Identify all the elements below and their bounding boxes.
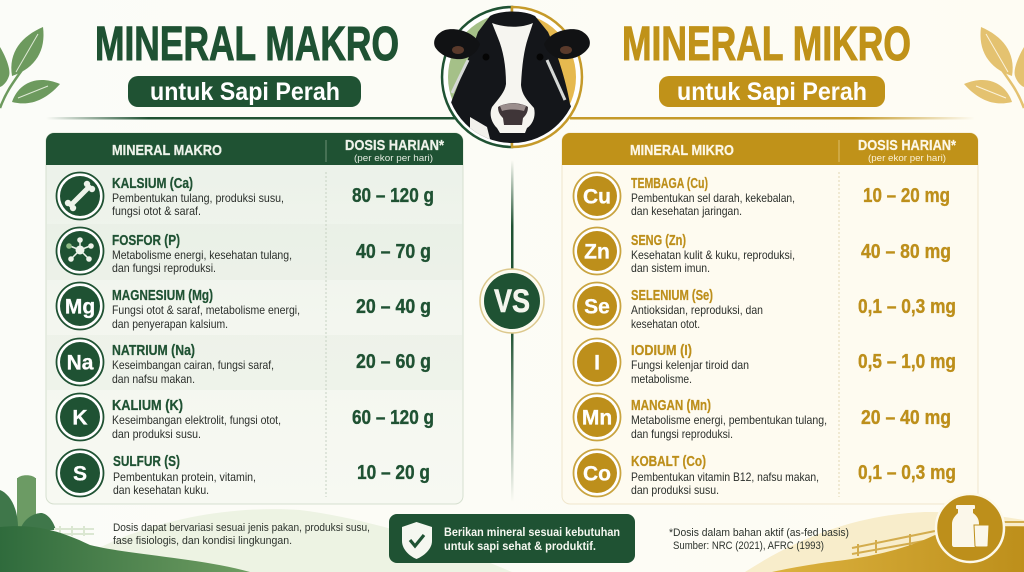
row: iodium: Fungsi kelenjar tiroid dan [631,358,749,372]
row: kobalt: Co [583,462,611,486]
subtitle pill: makro: untuk Sapi Perah [150,78,340,106]
row: iodium [574,338,956,386]
row: natrium: 20 – 60 g [356,351,431,373]
row: natrium: NATRIUM (Na) [112,343,195,359]
cow portrait [434,7,590,150]
row: kalium: Keseimbangan elektrolit, fungsi otot, [112,413,281,427]
panel: mineral makro: MINERAL MAKRO [112,142,222,159]
row: natrium: Na [67,352,94,374]
row: iodium: metabolisme. [631,372,692,386]
row: kalium: KALIUM (K) [112,398,183,414]
panel: mineral mikro: DOSIS HARIAN* [858,137,956,154]
panel: mineral mikro [562,133,978,504]
row shading [47,224,462,390]
row: magnesium: 20 – 40 g [356,296,431,318]
row: kobalt: dan produksi susu. [631,483,719,497]
subtitle pill: mikro: untuk Sapi Perah [677,78,867,106]
row: sulfur: Pembentukan protein, vitamin, [113,470,256,484]
row: tembaga [574,172,950,220]
row: kalium: dan produksi susu. [112,427,201,441]
vs badge: VS [494,283,530,319]
row: iodium: I [594,352,600,374]
row: magnesium: Fungsi otot & saraf, metabolisme energi, [112,303,300,317]
icon: green leaves [0,27,60,108]
row: fosfor [56,228,431,275]
panel: mineral makro: DOSIS HARIAN* [345,137,444,154]
row: magnesium [56,282,431,331]
footnote: variasi dosis: Dosis dapat bervariasi sesuai jenis pakan, produksi susu, [113,522,370,534]
row: selenium: Se [584,296,610,318]
row: iodium: IODIUM (I) [631,343,692,359]
row: natrium: Keseimbangan cairan, fungsi saraf, [112,358,274,372]
row: mangan: 20 – 40 mg [861,407,951,429]
panel: mineral mikro: MINERAL MIKRO [630,142,734,159]
row: magnesium: Mg [65,296,95,318]
footnote: sumber [669,527,849,552]
row: natrium: dan nafsu makan. [112,372,195,386]
row: fosfor: dan fungsi reproduksi. [112,261,216,275]
callout: berikan mineral [389,514,635,563]
icon: shield check [402,522,432,559]
row: fosfor: Metabolisme energi, kesehatan tulang, [112,248,292,262]
row: seng: 40 – 80 mg [861,241,951,263]
icon: molecule [70,240,90,259]
row: kalsium: KALSIUM (Ca) [112,176,193,192]
panel: mineral makro [46,133,463,504]
row: seng: Kesehatan kulit & kuku, reproduksi, [631,248,795,262]
row: seng: SENG (Zn) [631,233,686,249]
footnote: variasi dosis [113,522,370,547]
row: mangan: Mn [582,406,612,430]
row: kalsium [56,172,434,220]
row: sulfur: SULFUR (S) [113,454,180,470]
panel: mineral makro: (per ekor per hari) [354,153,433,164]
row: selenium: SELENIUM (Se) [631,288,713,304]
row: kobalt: Pembentukan vitamin B12, nafsu makan, [631,470,819,484]
row: kalsium: 80 – 120 g [352,185,434,207]
row: selenium: 0,1 – 0,3 mg [858,296,956,318]
row: tembaga: 10 – 20 mg [863,185,950,207]
row: magnesium: MAGNESIUM (Mg) [112,288,213,304]
callout: berikan mineral: untuk sapi sehat & produktif. [444,539,596,553]
row: selenium [574,282,956,331]
row: sulfur: dan kesehatan kuku. [113,483,209,497]
footnote: sumber: Sumber: NRC (2021), AFRC (1993) [673,540,824,552]
footnote: variasi dosis: fase fisiologis, dan kondisi lingkungan. [113,535,292,547]
callout: berikan mineral: Berikan mineral sesuai kebutuhan [444,525,620,539]
row: magnesium: dan penyerapan kalsium. [112,317,228,331]
row: seng: dan sistem imun. [631,261,710,275]
row: mangan: Metabolisme energi, pembentukan tulang, [631,413,827,427]
landscape: golden hills with fence [745,512,1024,572]
row: tembaga: Pembentukan sel darah, kekebalan, [631,191,795,205]
row: sulfur: 10 – 20 g [357,462,430,484]
row: fosfor: 40 – 70 g [356,241,431,263]
row: iodium: 0,5 – 1,0 mg [858,351,956,373]
row: sulfur [56,450,430,497]
icon: bone [71,187,89,205]
row: kobalt: 0,1 – 0,3 mg [858,462,956,484]
icon: milk can and glass [936,494,1004,562]
row: kalium [56,394,434,441]
landscape: green hills with barn [0,475,512,572]
row: tembaga: Cu [583,186,611,208]
row: seng [574,228,951,275]
row: seng: Zn [584,240,610,264]
row: natrium [56,338,431,386]
row: mangan: dan fungsi reproduksi. [631,427,733,441]
row: tembaga: dan kesehatan jaringan. [631,204,742,218]
icon: gold leaves [964,27,1024,108]
row: kalsium: Pembentukan tulang, produksi susu, [112,191,284,205]
vs badge [480,269,544,333]
row: kobalt [574,450,956,497]
footnote: sumber: *Dosis dalam bahan aktif (as-fed basis) [669,527,849,539]
row: fosfor: FOSFOR (P) [112,233,180,249]
row: mangan: MANGAN (Mn) [631,398,711,414]
row: selenium: Antioksidan, reproduksi, dan [631,303,763,317]
row: selenium: kesehatan otot. [631,317,700,331]
row: kalium: 60 – 120 g [352,407,434,429]
row: kalsium: fungsi otot & saraf. [112,204,201,218]
panel: mineral mikro: (per ekor per hari) [868,153,946,164]
title: mineral mikro: MINERAL MIKRO [622,18,911,71]
row: tembaga: TEMBAGA (Cu) [631,176,708,192]
row: kobalt: KOBALT (Co) [631,454,706,470]
row: kalium: K [72,406,88,430]
title: mineral makro: MINERAL MAKRO [95,18,399,71]
row: mangan [574,394,951,441]
row: sulfur: S [73,462,87,486]
